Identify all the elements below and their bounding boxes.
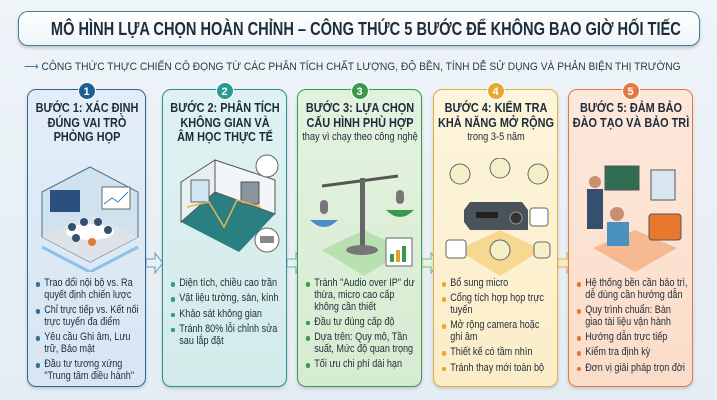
heading step 5: BƯỚC 5: ĐẢM BẢO [579,100,682,115]
badge 1: 1 [83,86,90,98]
title [18,11,700,46]
icon: training and maintenance [587,166,682,272]
badge 5 [622,82,640,100]
panel: step 1 [27,89,146,387]
heading step 1 [35,100,138,144]
heading step 5: ĐÀO TẠO VÀ BẢO TRÌ [572,114,689,130]
badge 3: 3 [356,86,363,98]
subtitle: ⟶ CÔNG THỨC THỰC CHIẾN CÔ ĐỌNG TỪ CÁC PHÂN TÍCH CHẤT LƯỢNG, ĐỘ BỀN, TÍNH DỄ SỬ DỤNG VÀ PHẢN BIỆN THỊ TRƯỜNG [24,61,681,73]
icon: meeting room [41,166,139,272]
heading step 2: KHÔNG GIAN VÀ [180,114,269,130]
bullets step 1 [36,277,139,382]
bullets step 4: Bổ sung micro [450,277,508,289]
heading step 5 [572,100,689,130]
arrow 2-3 [287,252,297,274]
bullets step 1: Yêu cầu Ghi âm, Lưu trữ, Bảo mật [44,331,130,355]
badge 2: 2 [221,86,228,98]
bullets step 1: Trao đổi nội bộ vs. Ra quyết định chiến lược [44,277,133,301]
bullets step 2: Tránh 80% lỗi chỉnh sửa sau lắp đặt [179,323,277,347]
bullets step 5: Hệ thống bền cần bảo trì, dễ dùng cần hướng dẫn [585,277,688,301]
heading step 1: PHÒNG HỌP [53,129,120,144]
panel: step 3 [297,89,422,387]
heading step 1: BƯỚC 1: XÁC ĐỊNH [35,100,138,115]
panel: step 4 [433,89,558,387]
badge 4 [486,82,504,100]
bullets step 4: Tránh thay mới toàn bộ [450,362,544,374]
badge 1 [78,82,96,100]
heading step 2: BƯỚC 2: PHÂN TÍCH [170,100,279,115]
bullets step 4: Cổng tích hợp họp trực tuyến [450,292,544,316]
icon: expandable hub [446,158,550,276]
heading step 3: BƯỚC 3: LỰA CHỌN [305,100,414,115]
icon: balance scale [310,174,414,276]
arrow 4-5 [558,252,568,274]
bullets step 3 [306,277,415,370]
bullets step 5: Quy trình chuẩn: Bàn giao tài liệu vận hành [585,304,671,328]
bullets step 2: Vật liệu tường, sàn, kính [179,292,278,304]
icon: room acoustics [180,154,280,252]
bullets step 5 [576,277,688,374]
bullets step 1: Chỉ trực tiếp vs. Kết nối trực tuyến đa điểm [44,304,139,328]
bullets step 5: Kiểm tra định kỳ [585,346,650,358]
heading step 3: CẤU HÌNH PHÙ HỢP [306,114,413,130]
bullets step 3: Dựa trên: Quy mô, Tần suất, Mức độ quan trọng [314,331,413,355]
title: MÔ HÌNH LỰA CHỌN HOÀN CHỈNH – CÔNG THỨC 5 BƯỚC ĐỂ KHÔNG BAO GIỜ HỐI TIẾC [51,18,681,39]
bullets step 4: Thiết kế có tầm nhìn [450,346,532,358]
bullets step 3: Đầu tư đúng cấp độ [314,316,394,328]
heading step 1: ĐÚNG VAI TRÒ [47,114,126,130]
bullets step 2: Diện tích, chiều cao trần [179,277,277,289]
heading step 4: trong 3-5 năm [467,131,524,143]
heading step 4: BƯỚC 4: KIỂM TRA [444,100,547,115]
bullets step 3: Tránh "Audio over IP" dư thừa, micro cao cấp không cần thiết [314,277,415,313]
badge 2 [216,82,234,100]
bullets step 4: Mở rộng camera hoặc ghi âm [450,319,539,343]
bullets step 5: Hướng dẫn trực tiếp [585,331,667,343]
badge 5: 5 [627,86,634,98]
heading step 4: KHẢ NĂNG MỞ RỘNG [437,114,554,130]
arrow 3-4 [422,252,433,274]
heading step 2 [170,100,279,144]
arrow 1-2 [146,252,162,274]
heading step 3 [302,100,418,143]
heading step 2: ÂM HỌC THỰC TẾ [177,129,272,144]
badge 4: 4 [492,86,499,98]
bullets step 2 [170,277,278,347]
bullets step 2: Khảo sát không gian [179,308,262,320]
heading step 3: thay vì chạy theo công nghệ [302,131,417,143]
heading step 4 [437,100,554,143]
bullets step 5: Đơn vị giải pháp trọn đời [585,362,685,374]
panel: step 2 [162,89,287,387]
bullets step 3: Tối ưu chi phí dài hạn [314,358,402,370]
panel: step 5 [568,89,693,387]
bullets step 4 [442,277,544,374]
bullets step 1: Đầu tư tương xứng "Trung tâm điều hành" [44,358,134,382]
badge 3 [350,82,368,100]
